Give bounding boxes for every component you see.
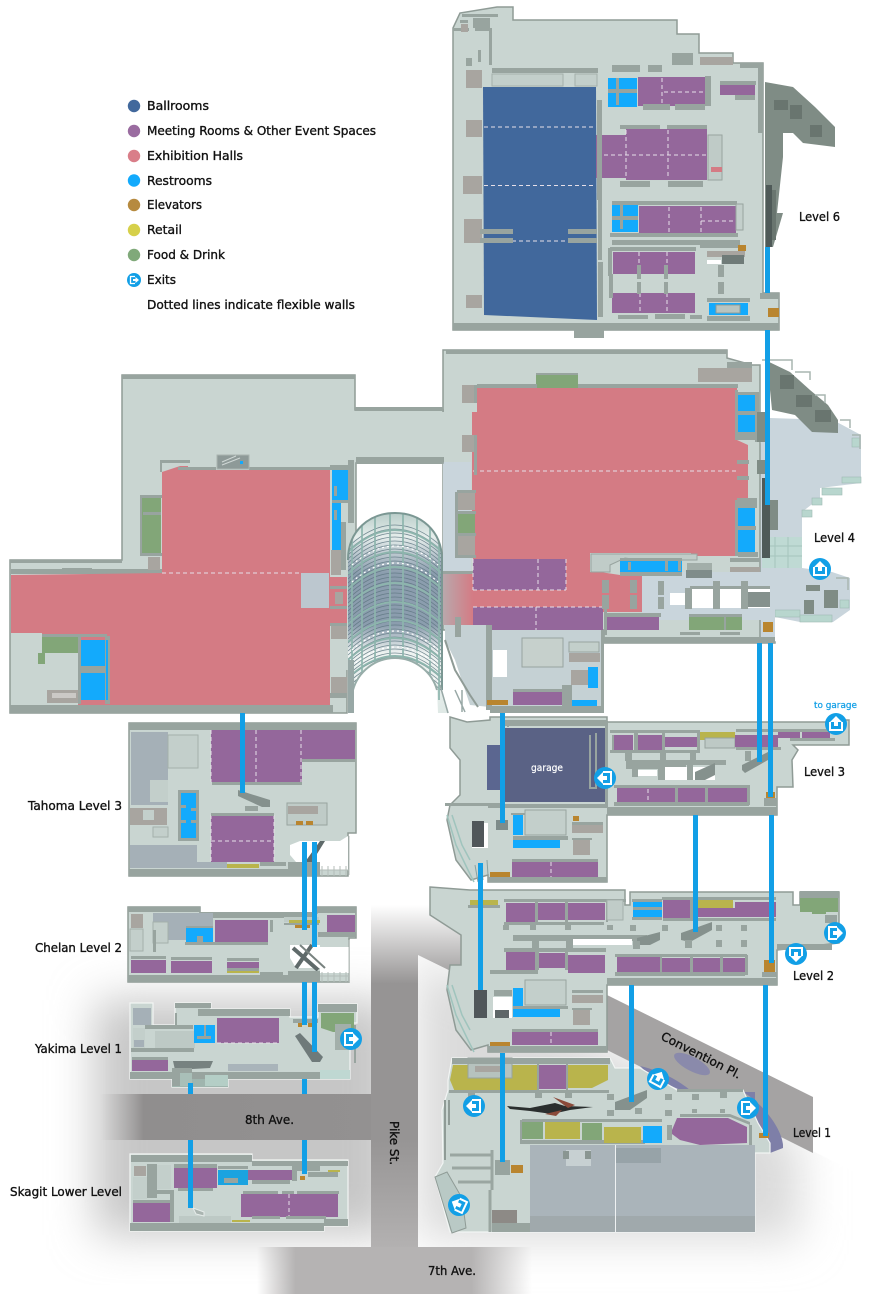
Tahoma Level 3 floor plan xyxy=(129,723,356,876)
to garage label: to garage xyxy=(814,701,857,711)
exit icon: level 3 garage xyxy=(594,767,616,789)
legend: Exhibition Halls xyxy=(147,149,243,163)
legend: Elevators xyxy=(147,198,202,212)
Yakima Level 1 floor plan xyxy=(130,1003,357,1087)
street labels: Pike St. xyxy=(387,1121,401,1165)
legend: Ballrooms xyxy=(147,99,209,113)
legend: Restrooms xyxy=(147,174,212,188)
floor level labels: Tahoma Level 3 xyxy=(27,799,122,813)
street labels: 8th Ave. xyxy=(245,1113,294,1127)
Level 2 floor plan xyxy=(430,887,839,1052)
Level 3 floor plan xyxy=(445,717,849,882)
glass atrium tube xyxy=(348,513,465,713)
legend: Dotted lines indicate flexible walls xyxy=(147,298,355,312)
exit icon: level 1 southwest xyxy=(444,1190,474,1220)
exit icon: level 1 convention place xyxy=(643,1064,673,1094)
exit icon: level 4 up xyxy=(809,558,831,580)
legend: Meeting Rooms & Other Event Spaces xyxy=(147,124,376,138)
street labels: 7th Ave. xyxy=(428,1264,476,1278)
floor level labels: Level 3 xyxy=(804,765,845,779)
exit icon: level 1 east xyxy=(737,1097,759,1119)
floor level labels: Level 4 xyxy=(814,531,855,545)
Level 4 floor plan, south extension xyxy=(445,617,604,713)
Level 6 floor plan xyxy=(453,7,835,338)
Level 4 floor plan, west hall xyxy=(10,375,450,713)
floor level labels: Level 2 xyxy=(793,969,834,983)
exit icon: level 2 east xyxy=(824,922,846,944)
floor level labels xyxy=(10,210,855,1199)
street labels: Convention Pl. xyxy=(659,1029,743,1082)
legend: Retail xyxy=(147,223,182,237)
floor level labels: Chelan Level 2 xyxy=(35,941,122,955)
Level 4 floor plan, east hall xyxy=(443,350,861,643)
exit icon: Yakima level 1 xyxy=(340,1028,362,1050)
Level 1 floor plan xyxy=(435,1058,783,1233)
street labels xyxy=(245,1029,743,1278)
exit icon: to garage xyxy=(825,713,847,735)
Skagit Lower Level floor plan xyxy=(130,1154,348,1231)
vertical connector lines xyxy=(188,247,774,1208)
exit icon: level 1 west xyxy=(463,1095,485,1117)
Chelan Level 2 floor plan xyxy=(128,907,356,982)
legend: Exits xyxy=(147,273,176,287)
legend xyxy=(127,99,376,312)
exit icon: level 2 down xyxy=(785,943,807,965)
garage label: garage xyxy=(531,763,563,774)
streets and ground shading xyxy=(95,905,813,1294)
floor level labels: Skagit Lower Level xyxy=(10,1185,122,1199)
floor level labels: Level 1 xyxy=(793,1126,831,1140)
floor level labels: Level 6 xyxy=(799,210,840,224)
legend: Food & Drink xyxy=(147,248,225,262)
floor level labels: Yakima Level 1 xyxy=(34,1042,122,1056)
